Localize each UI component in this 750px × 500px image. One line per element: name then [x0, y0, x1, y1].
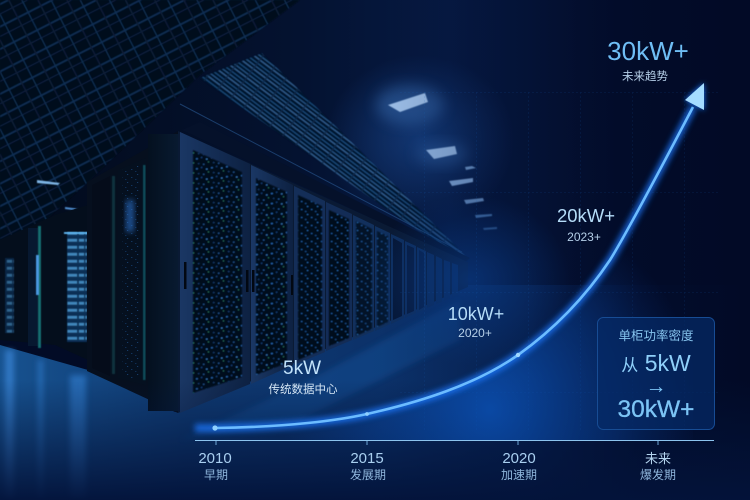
axis label: 2010: 2010 — [198, 450, 232, 467]
rack door 5 — [353, 215, 374, 340]
axis label: 2010 — [198, 450, 232, 482]
axis label: 2015 — [350, 450, 386, 482]
floor reflections — [5, 300, 460, 500]
ceiling lights — [37, 85, 497, 230]
label: 10kW+: 10kW+ — [448, 304, 504, 324]
label: 5kW — [268, 358, 338, 396]
floor — [0, 285, 750, 500]
curve glow — [195, 107, 693, 428]
rack door 7 — [391, 234, 404, 324]
label: 10kW+: 2020+ — [458, 326, 492, 340]
back left racks — [0, 205, 88, 360]
axis label: 2015: 发展期 — [350, 467, 386, 482]
arrow head — [685, 83, 704, 110]
callout: density range: 从 5kW — [621, 350, 691, 376]
rack door 3 — [294, 186, 325, 365]
rack door 9 — [417, 247, 426, 313]
main rack row — [178, 131, 468, 413]
axis label: 2010: 早期 — [204, 468, 228, 482]
area under curve — [215, 107, 693, 440]
label: 20kW+: 20kW+ — [557, 205, 615, 226]
axis label: 2015: 2015 — [350, 450, 384, 467]
data points — [212, 353, 520, 431]
label: 10kW+ — [448, 304, 504, 340]
chart: power density growth curve — [195, 83, 720, 482]
axis label: 2020: 2020 — [502, 450, 536, 467]
label: 20kW+: 2023+ — [567, 230, 601, 244]
label: 5kW: 5kW — [283, 358, 321, 379]
rack door 4 — [326, 202, 352, 351]
x axis — [195, 440, 714, 445]
rack door 6 — [375, 226, 390, 331]
axis label: future: 未来 — [645, 451, 671, 466]
label: 30kW+: 30kW+ — [607, 36, 689, 66]
label: 30kW+ — [607, 36, 689, 83]
ceiling — [0, 0, 750, 290]
callout: density range: 30kW+ — [618, 396, 694, 423]
curve line — [215, 107, 693, 428]
axis label: 2020: 加速期 — [501, 468, 537, 482]
rack door 1 — [180, 132, 250, 413]
rack door 2 — [251, 165, 293, 384]
axis label: future: 爆发期 — [640, 467, 676, 482]
axis label: 2020 — [501, 450, 537, 482]
label: 5kW: 传统数据中心 — [268, 382, 338, 396]
grid — [400, 92, 720, 432]
axis label: future — [640, 451, 676, 482]
label: 20kW+ — [557, 205, 615, 244]
label: 30kW+: 未来趋势 — [622, 70, 668, 83]
callout: density range: 单柜功率密度 — [618, 328, 694, 343]
corner rack block — [87, 131, 178, 413]
callout: density range: → — [646, 375, 666, 398]
rack door 8 — [405, 241, 416, 318]
right haze — [380, 0, 750, 500]
callout: density range — [598, 318, 714, 430]
